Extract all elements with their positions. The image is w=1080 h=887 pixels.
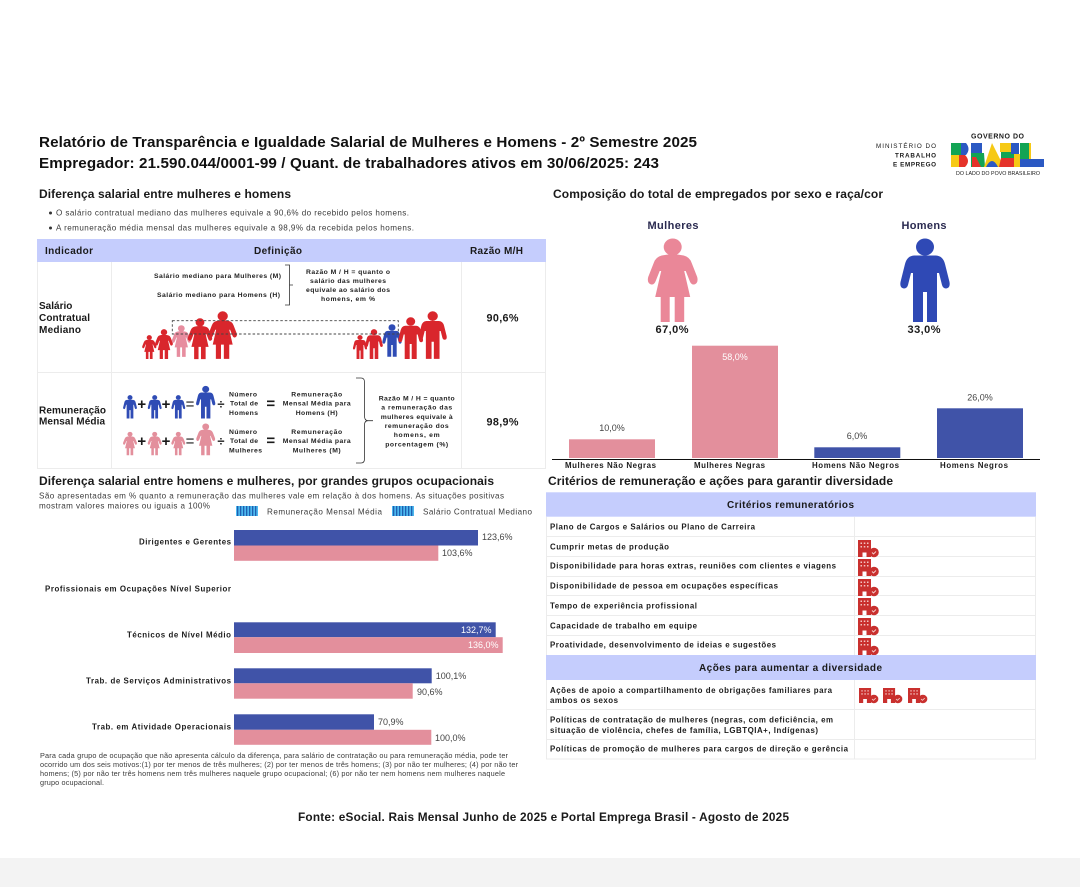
header: ações — [546, 655, 1036, 680]
title: Empregador: 21.590.044/0001-99 / Quant. de trabalhadores ativos em 30/06/2025: 243 — [39, 155, 659, 172]
equation: women: + — [137, 433, 146, 450]
bar chart: composição: Homens Não Negros — [812, 461, 900, 470]
ratio explanation 2: porcentagem (%) — [385, 442, 448, 448]
ratio explanation: salário das mulheres — [310, 278, 386, 285]
footnote — [40, 751, 519, 787]
panel: criteria table — [546, 492, 1036, 759]
equation: men — [123, 386, 351, 419]
subtext: mostram valores maiores ou iguais a 100% — [39, 502, 210, 510]
brace — [356, 378, 373, 463]
group: dirigentes: 123,6% — [482, 532, 513, 542]
figure: homens 33%: Homens — [902, 220, 946, 232]
equation: men: + — [137, 396, 146, 413]
equation: women: Remuneração — [291, 429, 342, 436]
logo: Ministério do Trabalho e Emprego: TRABALHO — [895, 152, 936, 160]
action rows: situação de violência, chefes de família, LGBTQIA+, Indígenas) — [550, 726, 818, 735]
group: serviços administrativos: Trab. de Serviços Administrativos — [86, 676, 232, 686]
equation: women: Mulheres (M) — [293, 448, 341, 454]
row label: remuneração mensal média: Remuneração — [39, 406, 106, 416]
group: serviços administrativos: 90,6% — [417, 687, 443, 697]
equation: women: ÷ — [217, 434, 225, 448]
group: técnicos: 132,7% — [461, 625, 492, 635]
subtext — [39, 492, 504, 510]
criteria rows — [550, 522, 837, 650]
group: técnicos — [127, 622, 503, 653]
row label: remuneração mensal média — [39, 406, 106, 428]
equation: women — [123, 423, 351, 455]
salary definition labels: Salário mediano para Homens (H) — [157, 292, 280, 299]
footnote: grupo ocupacional. — [40, 778, 104, 787]
criteria rows: Disponibilidade de pessoa em ocupações específicas — [550, 582, 779, 590]
group: técnicos: 136,0% — [468, 640, 499, 650]
group: profissionais: Profissionais em Ocupações Nível Superior — [45, 584, 231, 594]
dashed comparison box — [172, 321, 398, 334]
footnote: homens; (5) por não ter três homens nem três mulheres naquele grupo ocupacional; (6) por não ter nem homens nem mulheres naquele — [40, 769, 505, 778]
row label: salário contratual mediano — [39, 301, 90, 336]
logo: Governo do Brasil: DO LADO DO POVO BRASILEIRO — [956, 171, 1040, 177]
bar chart: composição: Homens Negros — [940, 461, 1009, 470]
group: atividade operacional: 100,0% — [435, 733, 466, 743]
criteria rows: Cumprir metas de produção — [550, 542, 669, 552]
bar chart: composição: 6,0% — [847, 431, 867, 441]
equation: men: + — [162, 396, 171, 413]
ratio explanation 2 — [379, 396, 455, 448]
logo: Governo do Brasil: GOVERNO DO — [971, 134, 1025, 140]
icons: women median line — [142, 311, 237, 359]
figure: mulheres 67%: 67,0% — [656, 324, 689, 336]
footnote: Para cada grupo de ocupação que não apresenta cálculo da diferença, para salário de contratação ou para remuneração média, pode ter — [40, 751, 509, 760]
ratio explanation: Razão M / H = quanto o — [306, 269, 390, 276]
bar chart: composição: 10,0% — [599, 423, 625, 433]
logo: Ministério do Trabalho e Emprego — [876, 141, 936, 168]
header: critérios remuneratórios — [546, 492, 1036, 517]
equation: men: Número — [229, 392, 257, 398]
title: Relatório de Transparência e Igualdade Salarial de Mulheres e Homens - 2º Semestre 2025 — [39, 134, 698, 151]
header: ações: Ações para aumentar a diversidade — [699, 663, 882, 674]
equation: men: = — [266, 396, 275, 412]
group: serviços administrativos — [86, 668, 466, 699]
bar chart: composição: Mulheres Negras — [694, 461, 766, 470]
ratio explanation 2: remuneração dos — [385, 423, 449, 430]
figure: mulheres 67% — [648, 220, 698, 336]
group: técnicos: Técnicos de Nível Médio — [127, 630, 231, 640]
bracket — [285, 265, 293, 305]
ratio explanation — [306, 269, 390, 303]
equation: men: ÷ — [217, 396, 225, 412]
legend: Remuneração Mensal Média — [267, 508, 382, 516]
criteria rows: Proatividade, desenvolvimento de ideias e sugestões — [550, 640, 777, 650]
action rows: Políticas de contratação de mulheres (negras, com deficiência, em — [550, 716, 833, 724]
table header: Indicador — [45, 246, 93, 257]
bar chart: composição: 58,0% — [722, 352, 748, 362]
bar chart: composição: Mulheres Não Negras — [565, 461, 657, 470]
bullet list: A remuneração média mensal das mulheres equivale a 98,9% da recebida pelos homens. — [56, 224, 414, 232]
group: atividade operacional — [92, 714, 466, 745]
equation: women: Número — [229, 429, 257, 436]
bullet list: O salário contratual mediano das mulheres equivale a 90,6% do recebido pelos homens. — [56, 208, 409, 218]
figure: homens 33%: 33,0% — [908, 324, 941, 336]
bar chart: composição — [552, 346, 1040, 470]
heading: critérios: Critérios de remuneração e ações para garantir diversidade — [548, 474, 893, 488]
equation: men: = — [186, 396, 195, 413]
source: Fonte: eSocial. Rais Mensal Junho de 2025 e Portal Emprega Brasil - Agosto de 2025 — [298, 810, 789, 824]
criteria rows: Tempo de experiência profissional — [550, 602, 697, 610]
table header — [37, 239, 546, 262]
ratio explanation 2: Razão M / H = quanto — [379, 396, 455, 402]
title — [39, 134, 698, 172]
salary definition labels: Salário mediano para Mulheres (M) — [154, 273, 281, 280]
ratio explanation 2: homens, em — [394, 432, 440, 439]
legend: Salário Contratual Mediano — [423, 508, 532, 516]
group: dirigentes — [139, 530, 513, 561]
icons: action buildings — [859, 688, 927, 703]
group: atividade operacional: 70,9% — [378, 717, 404, 727]
action rows: ambos os sexos — [550, 696, 619, 705]
header: critérios remuneratórios: Critérios remuneratórios — [727, 500, 854, 511]
logo: Ministério do Trabalho e Emprego: E EMPREGO — [893, 162, 936, 168]
equation: women: = — [266, 432, 275, 450]
ratio explanation 2: a remuneração das — [381, 404, 452, 412]
table header: Razão M/H — [470, 246, 523, 257]
logo: Ministério do Trabalho e Emprego: MINISTÉRIO DO — [876, 141, 936, 150]
ratio explanation: homens, em % — [321, 296, 375, 303]
action rows: Políticas de promoção de mulheres para cargos de direção e gerência — [550, 744, 849, 754]
group: dirigentes: Dirigentes e Gerentes — [139, 538, 232, 546]
group: dirigentes: 103,6% — [442, 548, 473, 558]
icons: building with check — [858, 540, 879, 655]
footnote: ocorrido um dos seis motivos:(1) por ter menos de três mulheres; (2) por ter menos de três homens; (3) por não ter mulheres; (4) por não ter — [40, 760, 519, 769]
figure: homens 33% — [900, 220, 950, 336]
subtext: São apresentadas em % quanto a remuneração das mulheres vale em relação à dos homens. As situações positivas — [39, 492, 504, 500]
group: atividade operacional: Trab. em Atividade Operacionais — [92, 722, 232, 732]
logo: Governo do Brasil — [951, 134, 1044, 177]
figure: mulheres 67%: Mulheres — [648, 220, 698, 232]
equation: women: Mulheres — [229, 448, 262, 454]
equation: women: = — [186, 433, 195, 450]
equation: men: Mensal Média para — [283, 400, 351, 408]
ratio explanation 2: mulheres equivale à — [381, 414, 453, 421]
equation: women: + — [162, 433, 171, 450]
row label: remuneração mensal média: Mensal Média — [39, 416, 105, 428]
equation: women: Mensal Média para — [283, 438, 351, 445]
row label: salário contratual mediano: Contratual — [39, 313, 90, 324]
equation: women: Total de — [230, 438, 258, 445]
action rows: Ações de apoio a compartilhamento de obrigações familiares para — [550, 686, 833, 695]
equation: men: Homens — [229, 410, 258, 417]
row label: salário contratual mediano: Mediano — [39, 325, 81, 336]
equation: men: Remuneração — [291, 392, 342, 398]
ratio explanation: equivale ao salário dos — [306, 287, 390, 294]
value: 90,6%: 90,6% — [486, 312, 519, 324]
bar chart: grupos ocupacionais — [45, 530, 513, 745]
heading: grupos ocupacionais: Diferença salarial entre homens e mulheres, por grandes grupos ocupacionais — [39, 474, 494, 488]
bullet list — [49, 208, 414, 232]
criteria rows: Plano de Cargos e Salários ou Plano de Carreira — [550, 522, 756, 532]
equation: men: Total de — [230, 400, 258, 408]
heading: diferença salarial: Diferença salarial entre mulheres e homens — [39, 187, 291, 201]
group: serviços administrativos: 100,1% — [436, 671, 466, 681]
action rows — [550, 686, 849, 754]
criteria rows: Capacidade de trabalho em equipe — [550, 622, 698, 630]
table header: Definição — [254, 246, 302, 257]
value: 98,9%: 98,9% — [486, 416, 519, 428]
equation: men: Homens (H) — [296, 410, 338, 417]
legend — [236, 506, 532, 516]
bar chart: composição: 26,0% — [967, 392, 993, 402]
panel: indicator table — [37, 239, 546, 469]
criteria rows: Disponibilidade para horas extras, reuniões com clientes e viagens — [550, 562, 837, 570]
salary definition labels — [154, 273, 281, 299]
icons: men median line — [353, 311, 447, 359]
bottom grey band — [0, 858, 1080, 887]
heading: composição: Composição do total de empregados por sexo e raça/cor — [553, 187, 883, 201]
row label: salário contratual mediano: Salário — [39, 301, 72, 312]
